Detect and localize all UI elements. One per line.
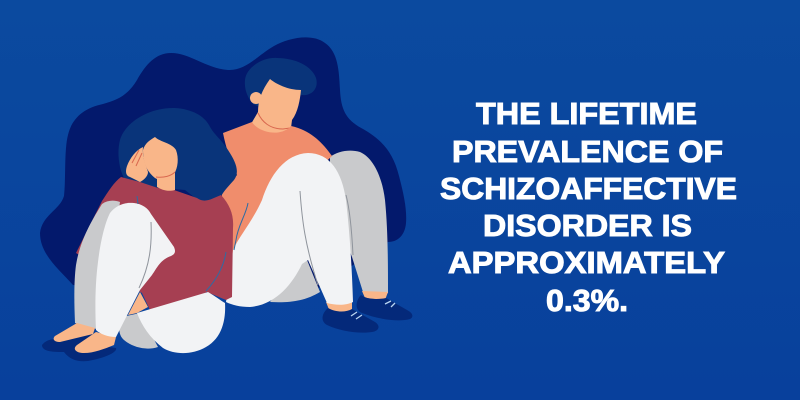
man's far leg bbox=[270, 151, 388, 302]
illustration: couple sitting bbox=[40, 37, 412, 361]
woman's wrist bbox=[128, 292, 148, 315]
headline text bbox=[440, 96, 737, 318]
headline text: DISORDER IS bbox=[483, 208, 692, 243]
headline text: SCHIZOAFFECTIVE bbox=[440, 171, 737, 206]
dark blob behind figures bbox=[40, 37, 406, 300]
woman's feet and shoes bbox=[42, 323, 116, 361]
woman's grey leg bbox=[74, 201, 158, 349]
man's head and hair bbox=[245, 58, 317, 134]
headline text: THE LIFETIME bbox=[476, 96, 697, 131]
woman's hair bbox=[118, 108, 237, 204]
man's shirt bbox=[220, 122, 332, 265]
headline text: PREVALENCE OF bbox=[452, 134, 723, 169]
headline text: APPROXIMATELY bbox=[448, 245, 725, 280]
woman's shirt bbox=[76, 177, 233, 310]
woman's white trousers bbox=[95, 203, 225, 353]
man's shoes bbox=[323, 291, 412, 333]
woman's face and hand bbox=[126, 137, 178, 191]
headline text: 0.3%. bbox=[546, 283, 628, 318]
clothing crease lines bbox=[137, 196, 248, 291]
man's white leg bbox=[226, 153, 353, 307]
